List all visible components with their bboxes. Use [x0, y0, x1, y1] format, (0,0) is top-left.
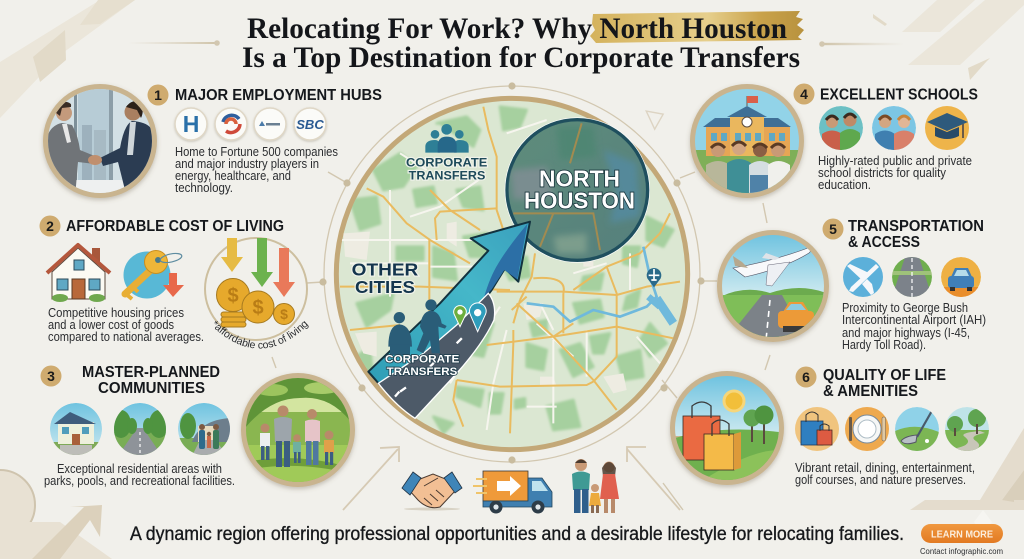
body 1: [175, 145, 338, 195]
badge 1: [148, 84, 168, 106]
central map panel: [336, 98, 688, 450]
icon: two students: [819, 106, 863, 150]
heading 5: TRANSPORTATION: [848, 218, 984, 235]
label: corporate transfers top: CORPORATE: [406, 156, 487, 170]
heading 3: MASTER-PLANNED: [82, 364, 220, 381]
label: other cities: OTHER: [352, 259, 418, 279]
heading 6: & AMENITIES: [823, 383, 918, 400]
map light areas: [343, 222, 627, 393]
contact line: Contact infographic.com: [920, 546, 1003, 556]
badge 4: [794, 84, 814, 104]
icon: coins and down arrows: [205, 238, 307, 340]
panel: 3 master-planned communities: [40, 364, 355, 488]
heading 6: [823, 367, 946, 400]
badge 6: 6: [802, 369, 810, 385]
icon: airport pin: [647, 268, 661, 287]
label: corporate transfers top: TRANSFERS: [409, 168, 485, 182]
heading 4: EXCELLENT SCHOOLS: [820, 86, 978, 104]
background decoration: top-left arrows: [0, 0, 135, 118]
icon: car: [941, 257, 981, 297]
background decoration: bottom-left arrow and ring: [0, 470, 112, 559]
curved caption: *affordable cost of living: [214, 320, 309, 349]
badge 2: 2: [46, 218, 54, 234]
body 2: compared to national averages.: [48, 330, 204, 344]
icon: coins and down arrows: $: [227, 285, 239, 307]
heading 1: MAJOR EMPLOYMENT HUBS: [175, 87, 382, 104]
icon: corporate team: [425, 124, 469, 153]
body 1: energy, healthcare, and: [175, 169, 291, 183]
label: other cities: CITIES: [355, 277, 415, 297]
photo: business handshake: [43, 84, 157, 200]
company logos: [175, 108, 326, 140]
icon: nature trail: [945, 407, 989, 452]
icon: shopping: [795, 407, 839, 451]
label: North Houston: HOUSTON: [524, 187, 635, 213]
panel: 5 transportation and access: [717, 218, 986, 352]
icon: tree-lined road: [114, 403, 166, 455]
body 3: [44, 462, 235, 488]
badge 1: 1: [154, 87, 162, 103]
badge 3: [40, 366, 62, 386]
title: Relocating For Work? Why North Houston: [247, 12, 787, 45]
icon: suburban house: [50, 403, 102, 456]
label: corporate transfers road: TRANSFERS: [387, 366, 458, 378]
gold brush highlight: [590, 11, 804, 43]
body 4: school districts for quality: [818, 166, 947, 180]
body 2: [48, 306, 204, 344]
icon: key with price-drop arrow: [124, 250, 184, 299]
road: [378, 293, 495, 418]
body 6: Vibrant retail, dining, entertainment,: [795, 461, 975, 475]
body 5: Intercontinental Airport (IAH): [842, 313, 986, 327]
badge 5: [822, 218, 844, 240]
North Houston circle: [505, 117, 650, 263]
photo: school and students: [690, 84, 804, 198]
body 2: and a lower cost of goods: [48, 318, 174, 332]
heading 5: [848, 218, 984, 251]
panel: 1 major employment hubs: [43, 84, 382, 200]
body 5: [842, 301, 986, 352]
body 4: education.: [818, 178, 871, 192]
body 1: technology.: [175, 181, 233, 195]
icon: family: [572, 459, 619, 513]
badge 6: [796, 366, 816, 388]
title: Is a Top Destination for Corporate Transfers: [242, 41, 800, 74]
closing statement: A dynamic region offering professional opportunities and a desirable lifestyle for relocating families.: [130, 523, 904, 545]
photo: family walking in park: [241, 373, 355, 487]
icon: graduation cap: [925, 106, 969, 150]
badge 5: 5: [829, 221, 837, 237]
heading 5: & ACCESS: [848, 234, 920, 251]
body 1: and major industry players in: [175, 157, 319, 171]
icon: two backpack students: [872, 106, 916, 150]
learn more button: LEARN MORE: [931, 528, 993, 540]
map pins: [454, 303, 486, 332]
body 5: and major highways (I-45,: [842, 326, 970, 340]
arrow toward North Houston: [368, 222, 530, 385]
title: [242, 11, 804, 74]
icon: family in neighbourhood: [178, 403, 230, 456]
icon: coins and down arrows: $: [280, 306, 288, 322]
photo: shopping bags and sun: [670, 371, 784, 485]
bottom arrows: [343, 447, 680, 510]
label: North Houston: [524, 166, 635, 213]
river and lake: [527, 247, 673, 323]
body 4: [818, 154, 972, 192]
badge 4: 4: [800, 86, 808, 102]
decorative connector lines: [128, 40, 904, 510]
badge 3: 3: [47, 368, 55, 384]
photo: plane over road: [717, 230, 829, 345]
label: other cities: [352, 259, 418, 297]
icon: coins and down arrows: $: [252, 297, 264, 319]
badge 2: [40, 216, 60, 236]
outer ring with node dots: [319, 82, 705, 464]
body 2: Competitive housing prices: [48, 306, 184, 320]
body 5: Proximity to George Bush: [842, 301, 968, 315]
panel: 6 quality of life and amenities: [670, 366, 989, 487]
icon: moving truck: [473, 471, 552, 514]
body 3: Exceptional residential areas with: [57, 462, 222, 476]
icon: house: [47, 245, 110, 302]
icon: golf club: [895, 407, 939, 451]
body 6: golf courses, and nature preserves.: [795, 473, 966, 487]
body 6: [795, 461, 975, 487]
heading 3: [82, 364, 220, 397]
learn more button: [921, 524, 1003, 543]
icon: airplane: [843, 257, 883, 297]
bottom icon row: [402, 459, 619, 514]
panel: 2 affordable cost of living: [40, 216, 309, 349]
heading 2: AFFORDABLE COST OF LIVING: [66, 218, 284, 235]
body 1: Home to Fortune 500 companies: [175, 145, 338, 159]
company logos: SBC: [296, 117, 324, 132]
label: corporate transfers top: [406, 156, 487, 182]
background decoration: top-right arrows: [873, 0, 1024, 80]
heading 3: COMMUNITIES: [98, 380, 205, 397]
body 4: Highly-rated public and private: [818, 154, 972, 168]
background decoration: bottom-right arrow: [910, 428, 1024, 534]
icon: transferring workers: [388, 299, 447, 355]
icon: handshake: [402, 472, 462, 510]
icon: highway overpass: [892, 257, 932, 297]
body 5: Hardy Toll Road).: [842, 338, 926, 352]
body 3: parks, pools, and recreational facilities.: [44, 474, 235, 488]
label: corporate transfers road: CORPORATE: [385, 354, 460, 366]
white streets: [340, 120, 660, 430]
heading 6: QUALITY OF LIFE: [823, 367, 946, 384]
label: corporate transfers road: [385, 354, 460, 378]
panel: 4 excellent schools: [690, 84, 978, 198]
company logos: H: [183, 111, 199, 137]
orange highways: [340, 107, 680, 433]
map parks: [350, 107, 673, 433]
label: North Houston: NORTH: [539, 166, 620, 192]
icon: dining plate: [845, 407, 889, 451]
